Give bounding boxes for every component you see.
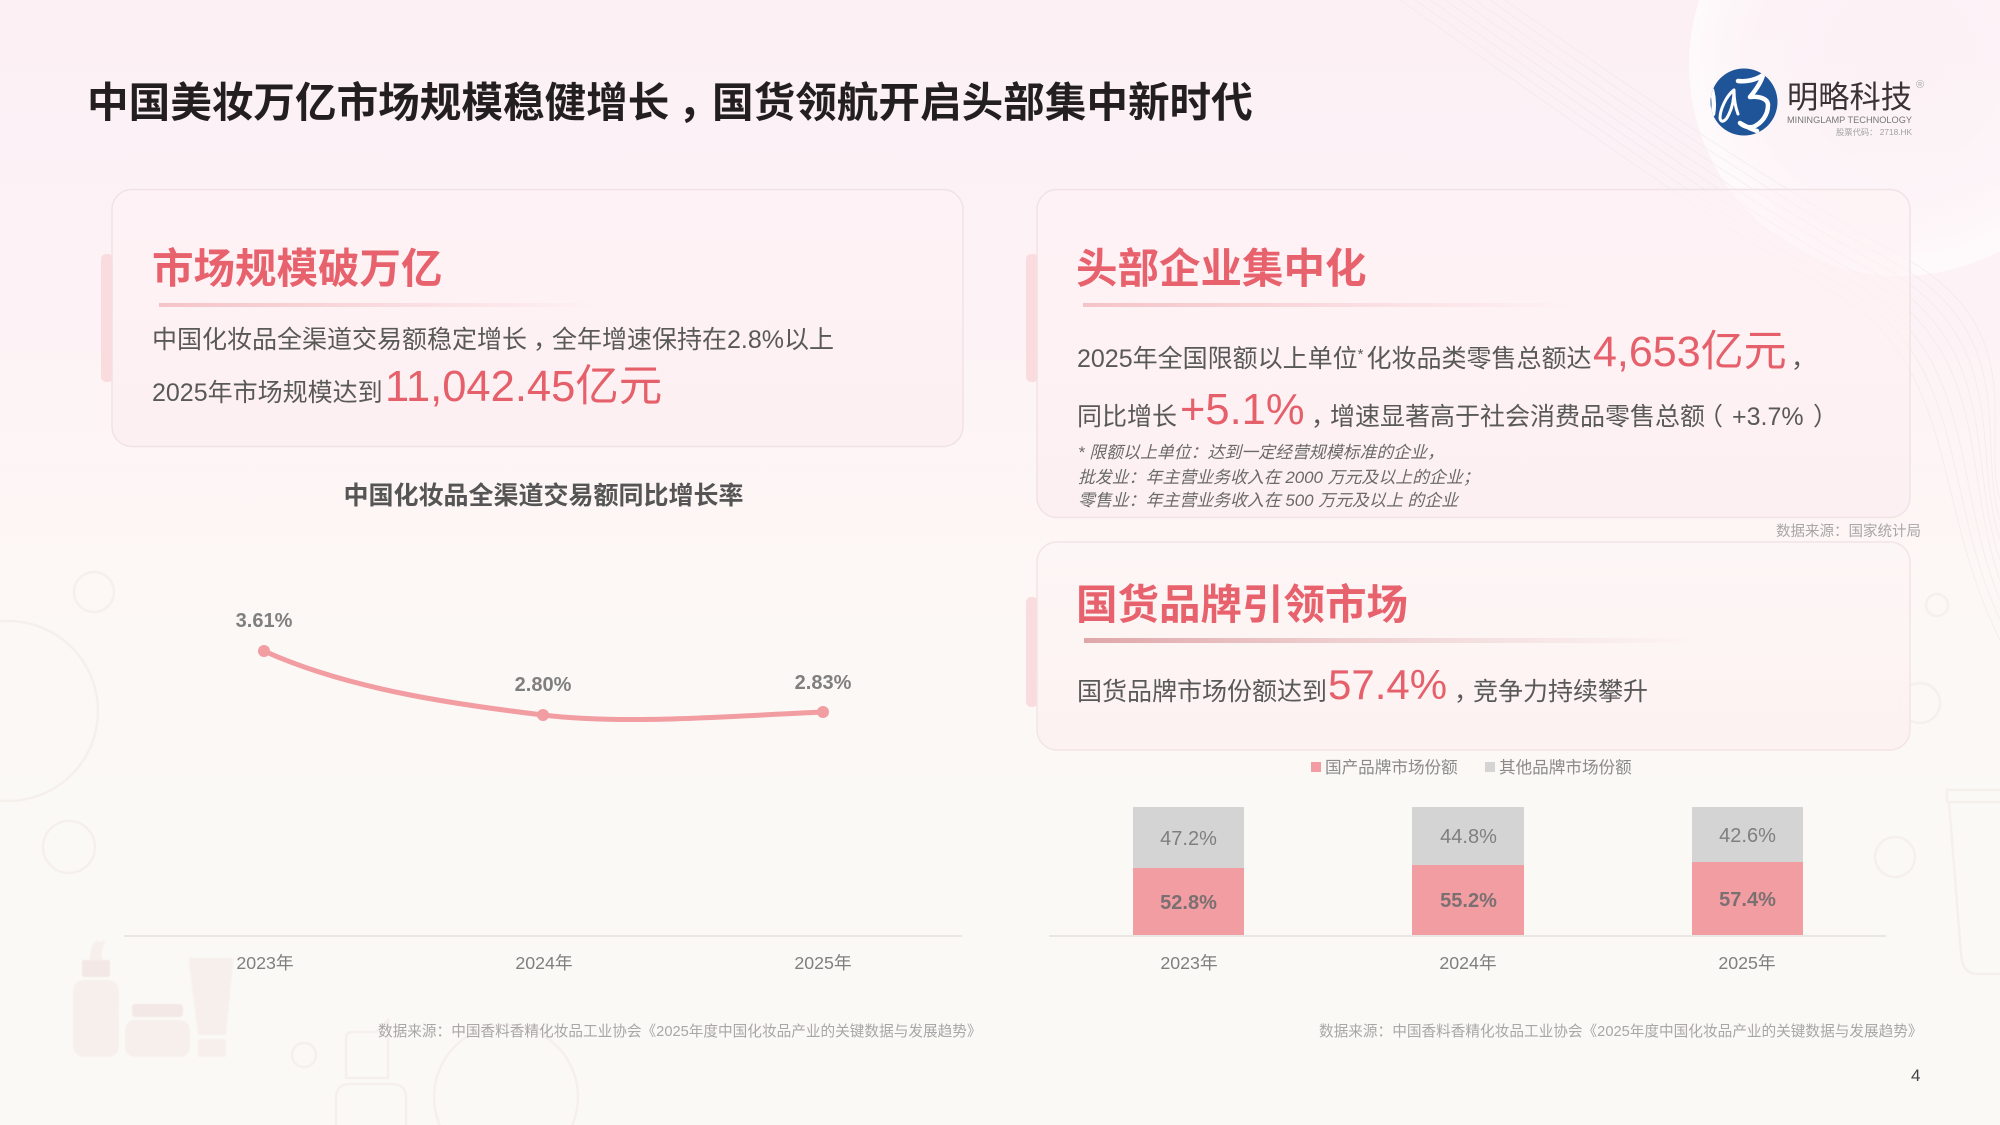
stacked bar chart: brand share: 2023年	[1160, 953, 1218, 973]
panel: domestic brands	[1026, 542, 1910, 750]
text: concentration body: ，	[1791, 345, 1816, 373]
text: concentration footnote: 零售业：年主营业务收入在 500 万元及以上 的企业	[1078, 491, 1460, 510]
text: domestic brands body: 竞争力持续攀升	[1473, 678, 1648, 706]
text: concentration body: +3.7%	[1732, 403, 1804, 431]
title: ，	[678, 79, 720, 126]
text: domestic brands body: 国货品牌市场份额达到	[1077, 678, 1327, 706]
icon: cosmetics group	[73, 940, 233, 1057]
line chart: growth rate: 2.80%	[515, 674, 572, 696]
stacked bar chart: brand share: 44.8%	[1440, 826, 1497, 848]
line chart: growth rate: 3.61%	[236, 610, 293, 632]
text: concentration body: 4,653亿元	[1593, 328, 1787, 376]
legend: 国产品牌市场份额	[1325, 758, 1458, 777]
source: left chart: 数据来源：中国香料香精化妆品工业协会《2025年度中国化妆品产业的关键数据与发展趋势》	[378, 1023, 982, 1040]
stacked bar chart: brand share: 2025年	[1718, 953, 1776, 973]
text: market size body	[152, 326, 834, 411]
stacked bar chart: brand share	[1049, 807, 1886, 973]
text: concentration body: ）	[1813, 403, 1838, 431]
text: concentration body	[1077, 328, 1838, 434]
logo: MININGLAMP TECHNOLOGY	[1787, 115, 1913, 126]
stacked bar chart: brand share: 42.6%	[1719, 825, 1776, 847]
text: concentration footnote: 批发业：年主营业务收入在 2000 万元及以上的企业；	[1078, 468, 1480, 487]
legend	[1311, 758, 1632, 777]
text: market size body: 中国化妆品全渠道交易额稳定增长	[152, 326, 527, 354]
line chart: growth rate: 2025年	[794, 953, 852, 973]
text: concentration body: 增速显著高于社会消费品零售总额	[1330, 403, 1705, 431]
source: national statistics: 数据来源：国家统计局	[1776, 523, 1921, 540]
heading: market size: 市场规模破万亿	[152, 245, 443, 292]
text: market size body: 2025年市场规模达到	[152, 379, 383, 407]
stacked bar chart: brand share: 52.8%	[1160, 892, 1217, 914]
legend: 其他品牌市场份额	[1499, 758, 1632, 777]
text: domestic brands body: ，	[1454, 678, 1479, 706]
chart title: growth rate: 中国化妆品全渠道交易额同比增长率	[343, 482, 744, 510]
heading: concentration: 头部企业集中化	[1076, 245, 1367, 292]
panel: top company concentration	[1026, 190, 1910, 518]
text: concentration body: 化妆品类零售总额达	[1366, 345, 1591, 373]
stacked bar chart: brand share: 57.4%	[1719, 889, 1776, 911]
stacked bar chart: brand share: 47.2%	[1160, 828, 1217, 850]
source: right chart: 数据来源：中国香料香精化妆品工业协会《2025年度中国化妆品产业的关键数据与发展趋势》	[1319, 1023, 1923, 1040]
line chart: growth rate: 2.83%	[795, 672, 852, 694]
text: concentration body: *	[1358, 346, 1364, 363]
text: concentration body: +5.1%	[1180, 386, 1305, 434]
page number: 4	[1911, 1066, 1920, 1085]
logo: 明略科技	[1787, 80, 1912, 115]
title: 国货领航开启头部集中新时代	[712, 79, 1253, 126]
text: market size body: ，	[533, 326, 558, 354]
title: 中国美妆万亿市场规模稳健增长	[87, 79, 669, 126]
text: market size body: 全年增速保持在2.8%以上	[552, 326, 834, 354]
text: domestic brands body: 57.4%	[1328, 661, 1447, 708]
stacked bar chart: brand share: 55.2%	[1440, 890, 1497, 912]
text: concentration footnote	[1078, 443, 1480, 510]
logo	[1710, 68, 1924, 137]
logo: ®	[1916, 79, 1924, 91]
line chart: growth rate: 2024年	[515, 953, 573, 973]
line chart: growth rate	[124, 610, 962, 973]
panel: market size	[101, 190, 963, 446]
text: concentration body: 同比增长	[1077, 403, 1177, 431]
heading: domestic brands: 国货品牌引领市场	[1076, 581, 1408, 628]
text: concentration footnote: * 限额以上单位：达到一定经营规模标准的企业，	[1078, 443, 1444, 462]
text: market size body: 11,042.45亿元	[385, 363, 662, 411]
logo: 股票代码： 2718.HK	[1836, 127, 1913, 137]
text: concentration body: （	[1698, 403, 1723, 431]
text: concentration body: ，	[1311, 403, 1336, 431]
stacked bar chart: brand share: 2024年	[1439, 953, 1497, 973]
text: concentration body: 2025年全国限额以上单位	[1077, 345, 1358, 373]
line chart: growth rate: 2023年	[236, 953, 294, 973]
